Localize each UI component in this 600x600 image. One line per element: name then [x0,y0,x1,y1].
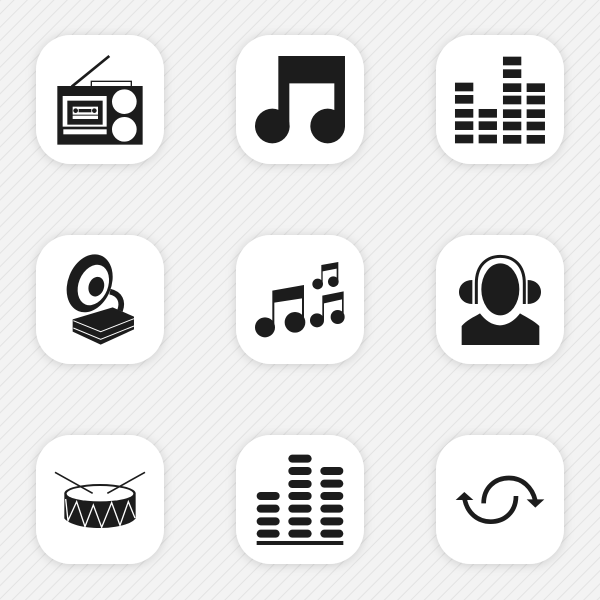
panel: equalizer tile [436,35,564,164]
panel: radio tile [36,35,164,164]
icon: group of music notes [255,262,345,337]
panel: drum tile [36,435,164,564]
panel: rounded equalizer tile [236,435,364,564]
panel: music note tile [236,35,364,164]
icon: gramophone [58,247,134,345]
panel: gramophone tile [36,235,164,364]
icon: rounded equalizer bars [257,455,343,545]
panel: headphones person tile [436,235,564,364]
icon: drum and sticks [55,472,145,528]
panel: music notes tile [236,235,364,364]
panel: sync arrows tile [436,435,564,564]
icon: equalizer bars [455,57,545,144]
icon: radio cassette player [57,56,143,145]
icon: person with headphones [459,256,541,345]
icon: beamed eighth notes [255,56,345,143]
icon: circular sync arrows [456,478,544,522]
